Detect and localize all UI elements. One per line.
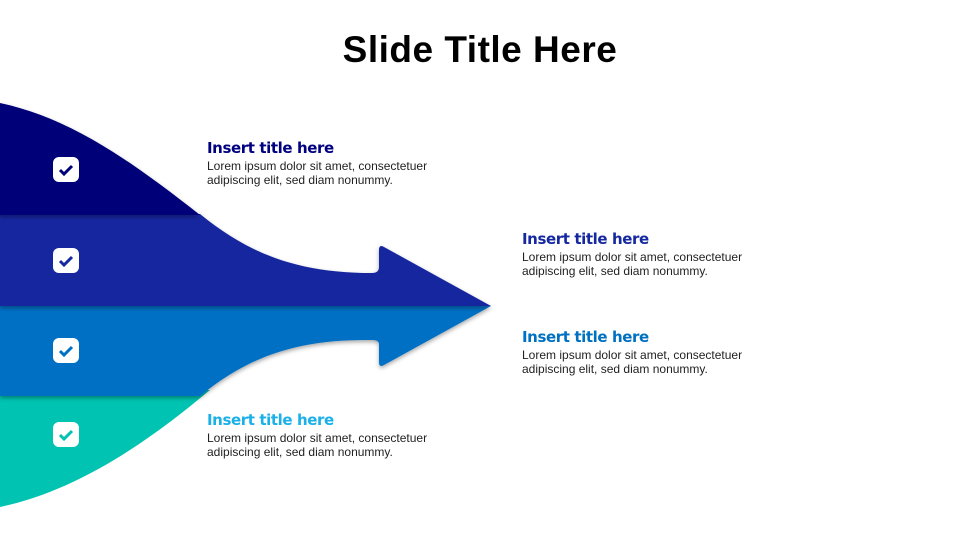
band 2 royal blue with upper arrow half: [0, 214, 491, 306]
icon: check 2: [53, 248, 79, 273]
icon: check 4: [53, 422, 79, 447]
text block 4: Lorem ipsum dolor sit amet, consectetuer adipiscing elit, sed diam nonummy.: [207, 431, 427, 459]
band 4 teal: [0, 390, 210, 507]
text block 2: Lorem ipsum dolor sit amet, consectetuer adipiscing elit, sed diam nonummy.: [522, 250, 742, 278]
band 3 blue with lower arrow half: [0, 306, 491, 396]
text block 3: Insert title here: [522, 328, 649, 346]
text block 4: [207, 411, 427, 459]
text block 3: Lorem ipsum dolor sit amet, consectetuer adipiscing elit, sed diam nonummy.: [522, 348, 742, 376]
text block 3: [522, 328, 742, 376]
text block 4: Insert title here: [207, 411, 334, 429]
text block 2: [522, 230, 742, 278]
icon: check 1: [53, 157, 79, 182]
band 1 navy: [0, 103, 200, 215]
text block 1: Insert title here: [207, 139, 334, 157]
text block 2: Insert title here: [522, 230, 649, 248]
icon: check 3: [53, 338, 79, 363]
title: Slide Title Here: [343, 29, 617, 70]
text block 1: [207, 139, 427, 187]
text block 1: Lorem ipsum dolor sit amet, consectetuer adipiscing elit, sed diam nonummy.: [207, 159, 427, 187]
